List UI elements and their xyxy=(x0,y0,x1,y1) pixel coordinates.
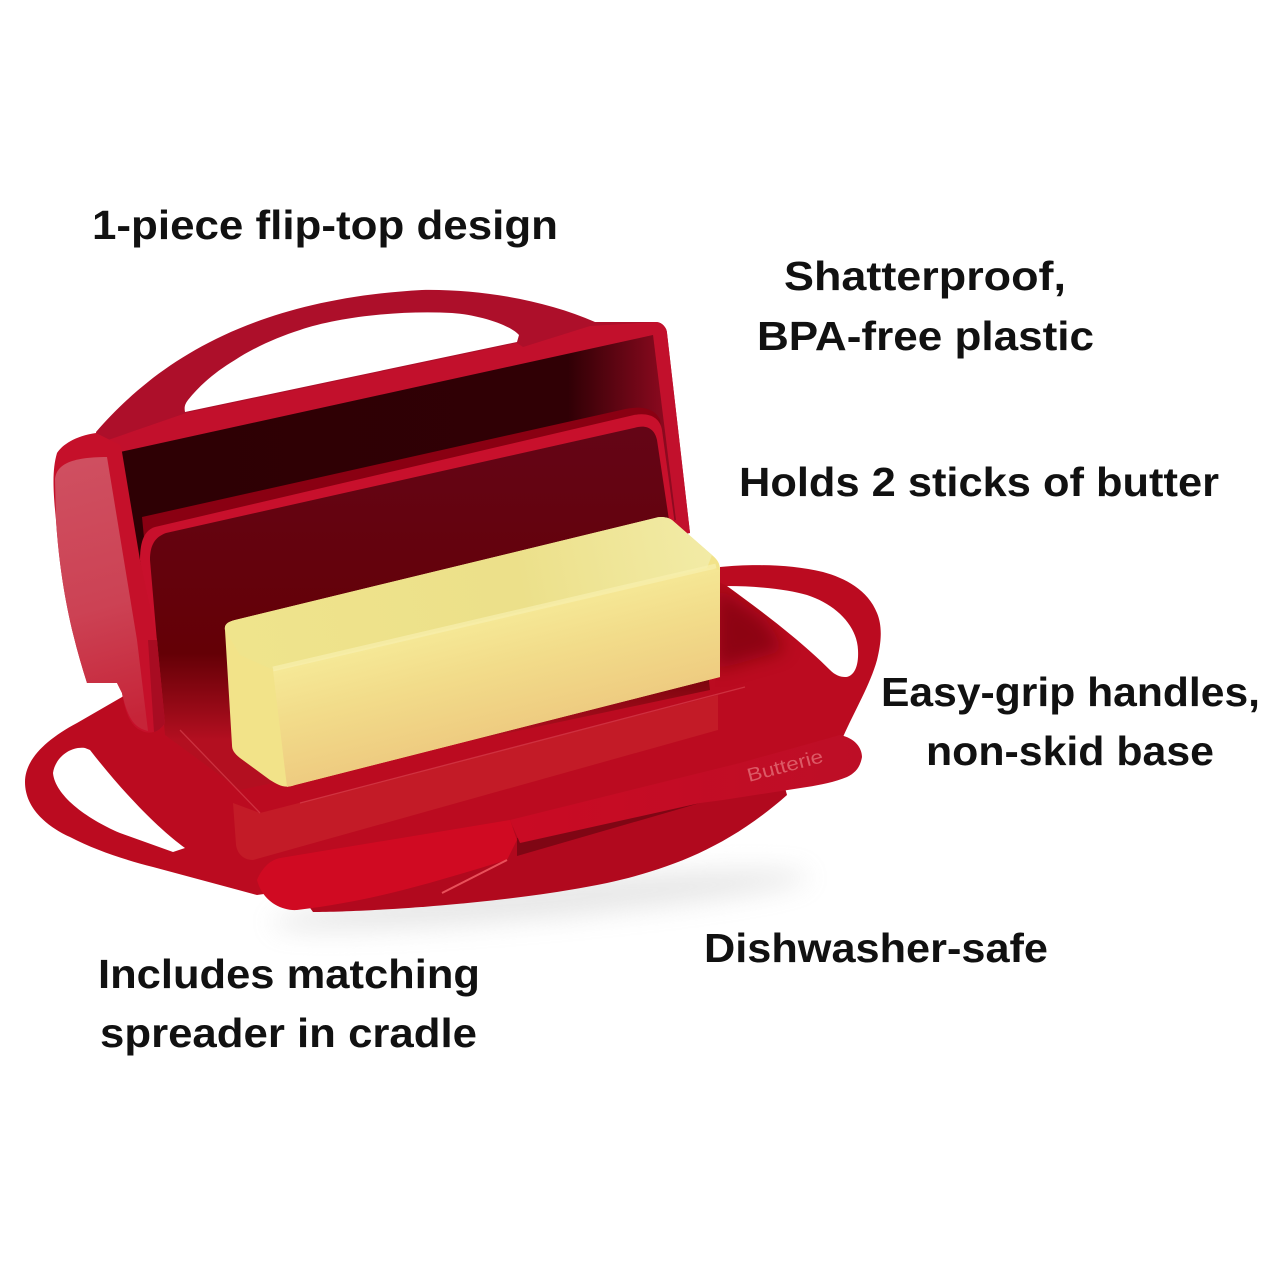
lid with carrying handle xyxy=(96,290,690,650)
label: handles and base xyxy=(881,669,1260,774)
label: handles and base: Easy-grip handles, xyxy=(881,669,1260,715)
inner flap rim xyxy=(140,414,680,723)
inner flap panel xyxy=(150,427,710,790)
ground shadow xyxy=(269,859,811,941)
butter ridge highlight xyxy=(273,566,716,669)
inner flap top band xyxy=(142,408,673,600)
label: shatterproof plastic: BPA-free plastic xyxy=(757,313,1094,359)
label: shatterproof plastic xyxy=(757,253,1094,359)
tray front lighter block xyxy=(233,695,718,860)
label: handles and base: non-skid base xyxy=(926,728,1214,774)
side wall glossy face xyxy=(55,457,148,731)
tray recess line xyxy=(180,687,745,813)
tray dark reflection xyxy=(715,585,785,670)
infographic canvas xyxy=(25,210,1258,1056)
label: flip-top design: 1-piece flip-top design xyxy=(92,202,558,248)
spreader knife xyxy=(257,735,862,910)
label: spreader: Includes matching xyxy=(98,951,480,997)
label: spreader: spreader in cradle xyxy=(100,1010,477,1056)
blade highlight xyxy=(442,860,507,893)
lid interior back wall xyxy=(120,335,676,640)
label: dishwasher-safe: Dishwasher-safe xyxy=(704,925,1048,971)
spreader blade xyxy=(257,820,517,910)
cradle slot xyxy=(517,803,700,856)
spreader handle xyxy=(510,735,862,843)
side wall inner strip xyxy=(148,640,165,732)
tray with handles xyxy=(25,565,881,895)
lid front rim highlight xyxy=(108,322,690,533)
butter front face xyxy=(273,568,720,787)
brand mark: Butterie xyxy=(745,746,826,787)
label: holds butter: Holds 2 sticks of butter xyxy=(739,459,1219,505)
butter stick xyxy=(225,517,720,787)
butter silhouette xyxy=(225,517,720,787)
lid left side wall xyxy=(54,433,165,733)
product: butter dish xyxy=(25,290,881,912)
tray cradle underside xyxy=(290,770,787,912)
label: shatterproof plastic: Shatterproof, xyxy=(784,253,1066,299)
label: spreader xyxy=(98,951,480,1056)
butter top face xyxy=(225,517,712,670)
